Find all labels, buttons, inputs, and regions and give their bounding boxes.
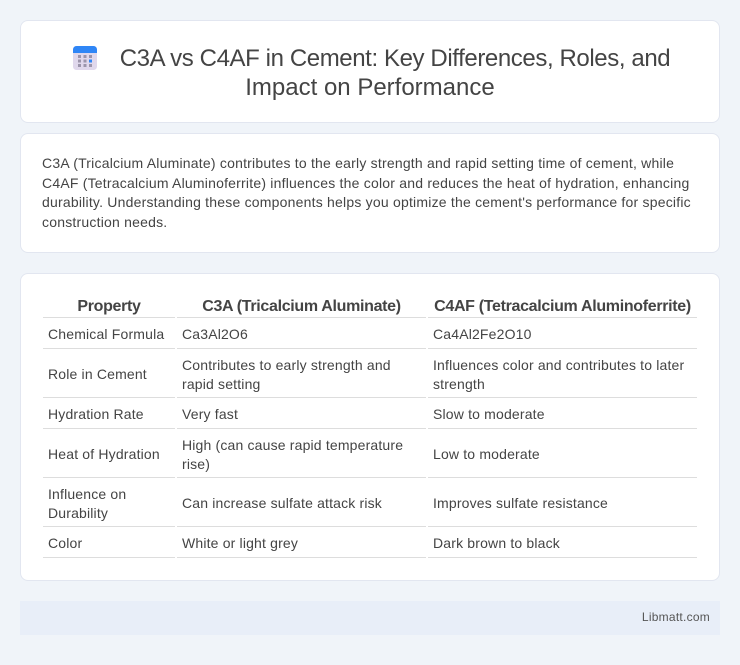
panel: comparison table xyxy=(20,273,720,581)
row: hydration rate: Very fast xyxy=(182,406,238,422)
row: role in cement xyxy=(48,357,684,392)
text block: introduction xyxy=(42,155,691,230)
row: influence on durability: Durability xyxy=(48,505,108,521)
row: influence on durability: Can increase sulfate attack risk xyxy=(182,495,382,511)
text block: introduction: durability. Understanding these components helps you optimize the cement's performance for specific xyxy=(42,194,691,210)
footer xyxy=(20,601,720,635)
table header: Property xyxy=(77,298,141,315)
row: influence on durability xyxy=(48,486,608,521)
table header: C3A (Tricalcium Aluminate) xyxy=(202,298,401,315)
row: heat of hydration: High (can cause rapid temperature xyxy=(182,437,403,453)
row: chemical formula xyxy=(48,326,532,342)
row: chemical formula: Ca4Al2Fe2O10 xyxy=(433,326,532,342)
row: role in cement: strength xyxy=(433,376,485,392)
row: heat of hydration xyxy=(48,437,540,472)
table header xyxy=(77,298,691,315)
text block: introduction: C4AF (Tetracalcium Aluminoferrite) influences the color and reduces the heat of hydration, enhancing xyxy=(42,175,689,191)
row: chemical formula: Chemical Formula xyxy=(48,326,164,342)
row: hydration rate: Slow to moderate xyxy=(433,406,545,422)
row: role in cement: Role in Cement xyxy=(48,366,147,382)
text block: introduction: C3A (Tricalcium Aluminate) contributes to the early strength and rapid setting time of cement, while xyxy=(42,155,674,171)
text block: introduction: construction needs. xyxy=(42,214,167,230)
row: hydration rate xyxy=(48,406,545,422)
table header: C4AF (Tetracalcium Aluminoferrite) xyxy=(434,298,691,315)
row: influence on durability: Influence on xyxy=(48,486,126,502)
title xyxy=(120,45,670,101)
table: properties xyxy=(43,298,697,558)
row: influence on durability: Improves sulfate resistance xyxy=(433,495,608,511)
row: role in cement: Influences color and contributes to later xyxy=(433,357,684,373)
row: color: Dark brown to black xyxy=(433,535,560,551)
row: heat of hydration: rise) xyxy=(182,456,210,472)
title: Impact on Performance xyxy=(245,74,495,101)
row: hydration rate: Hydration Rate xyxy=(48,406,144,422)
title: C3A vs C4AF in Cement: Key Differences, Roles, and xyxy=(120,45,670,72)
row: heat of hydration: Heat of Hydration xyxy=(48,446,160,462)
panel: introduction xyxy=(20,133,720,253)
row: role in cement: Contributes to early strength and xyxy=(182,357,391,373)
footer credit: Libmatt.com xyxy=(642,610,710,624)
row: color: White or light grey xyxy=(182,535,298,551)
row: role in cement: rapid setting xyxy=(182,376,260,392)
row: color xyxy=(48,535,560,551)
icon: calendar xyxy=(73,46,97,70)
row: chemical formula: Ca3Al2O6 xyxy=(182,326,248,342)
panel: header xyxy=(20,20,720,123)
row: heat of hydration: Low to moderate xyxy=(433,446,540,462)
row: color: Color xyxy=(48,535,82,551)
